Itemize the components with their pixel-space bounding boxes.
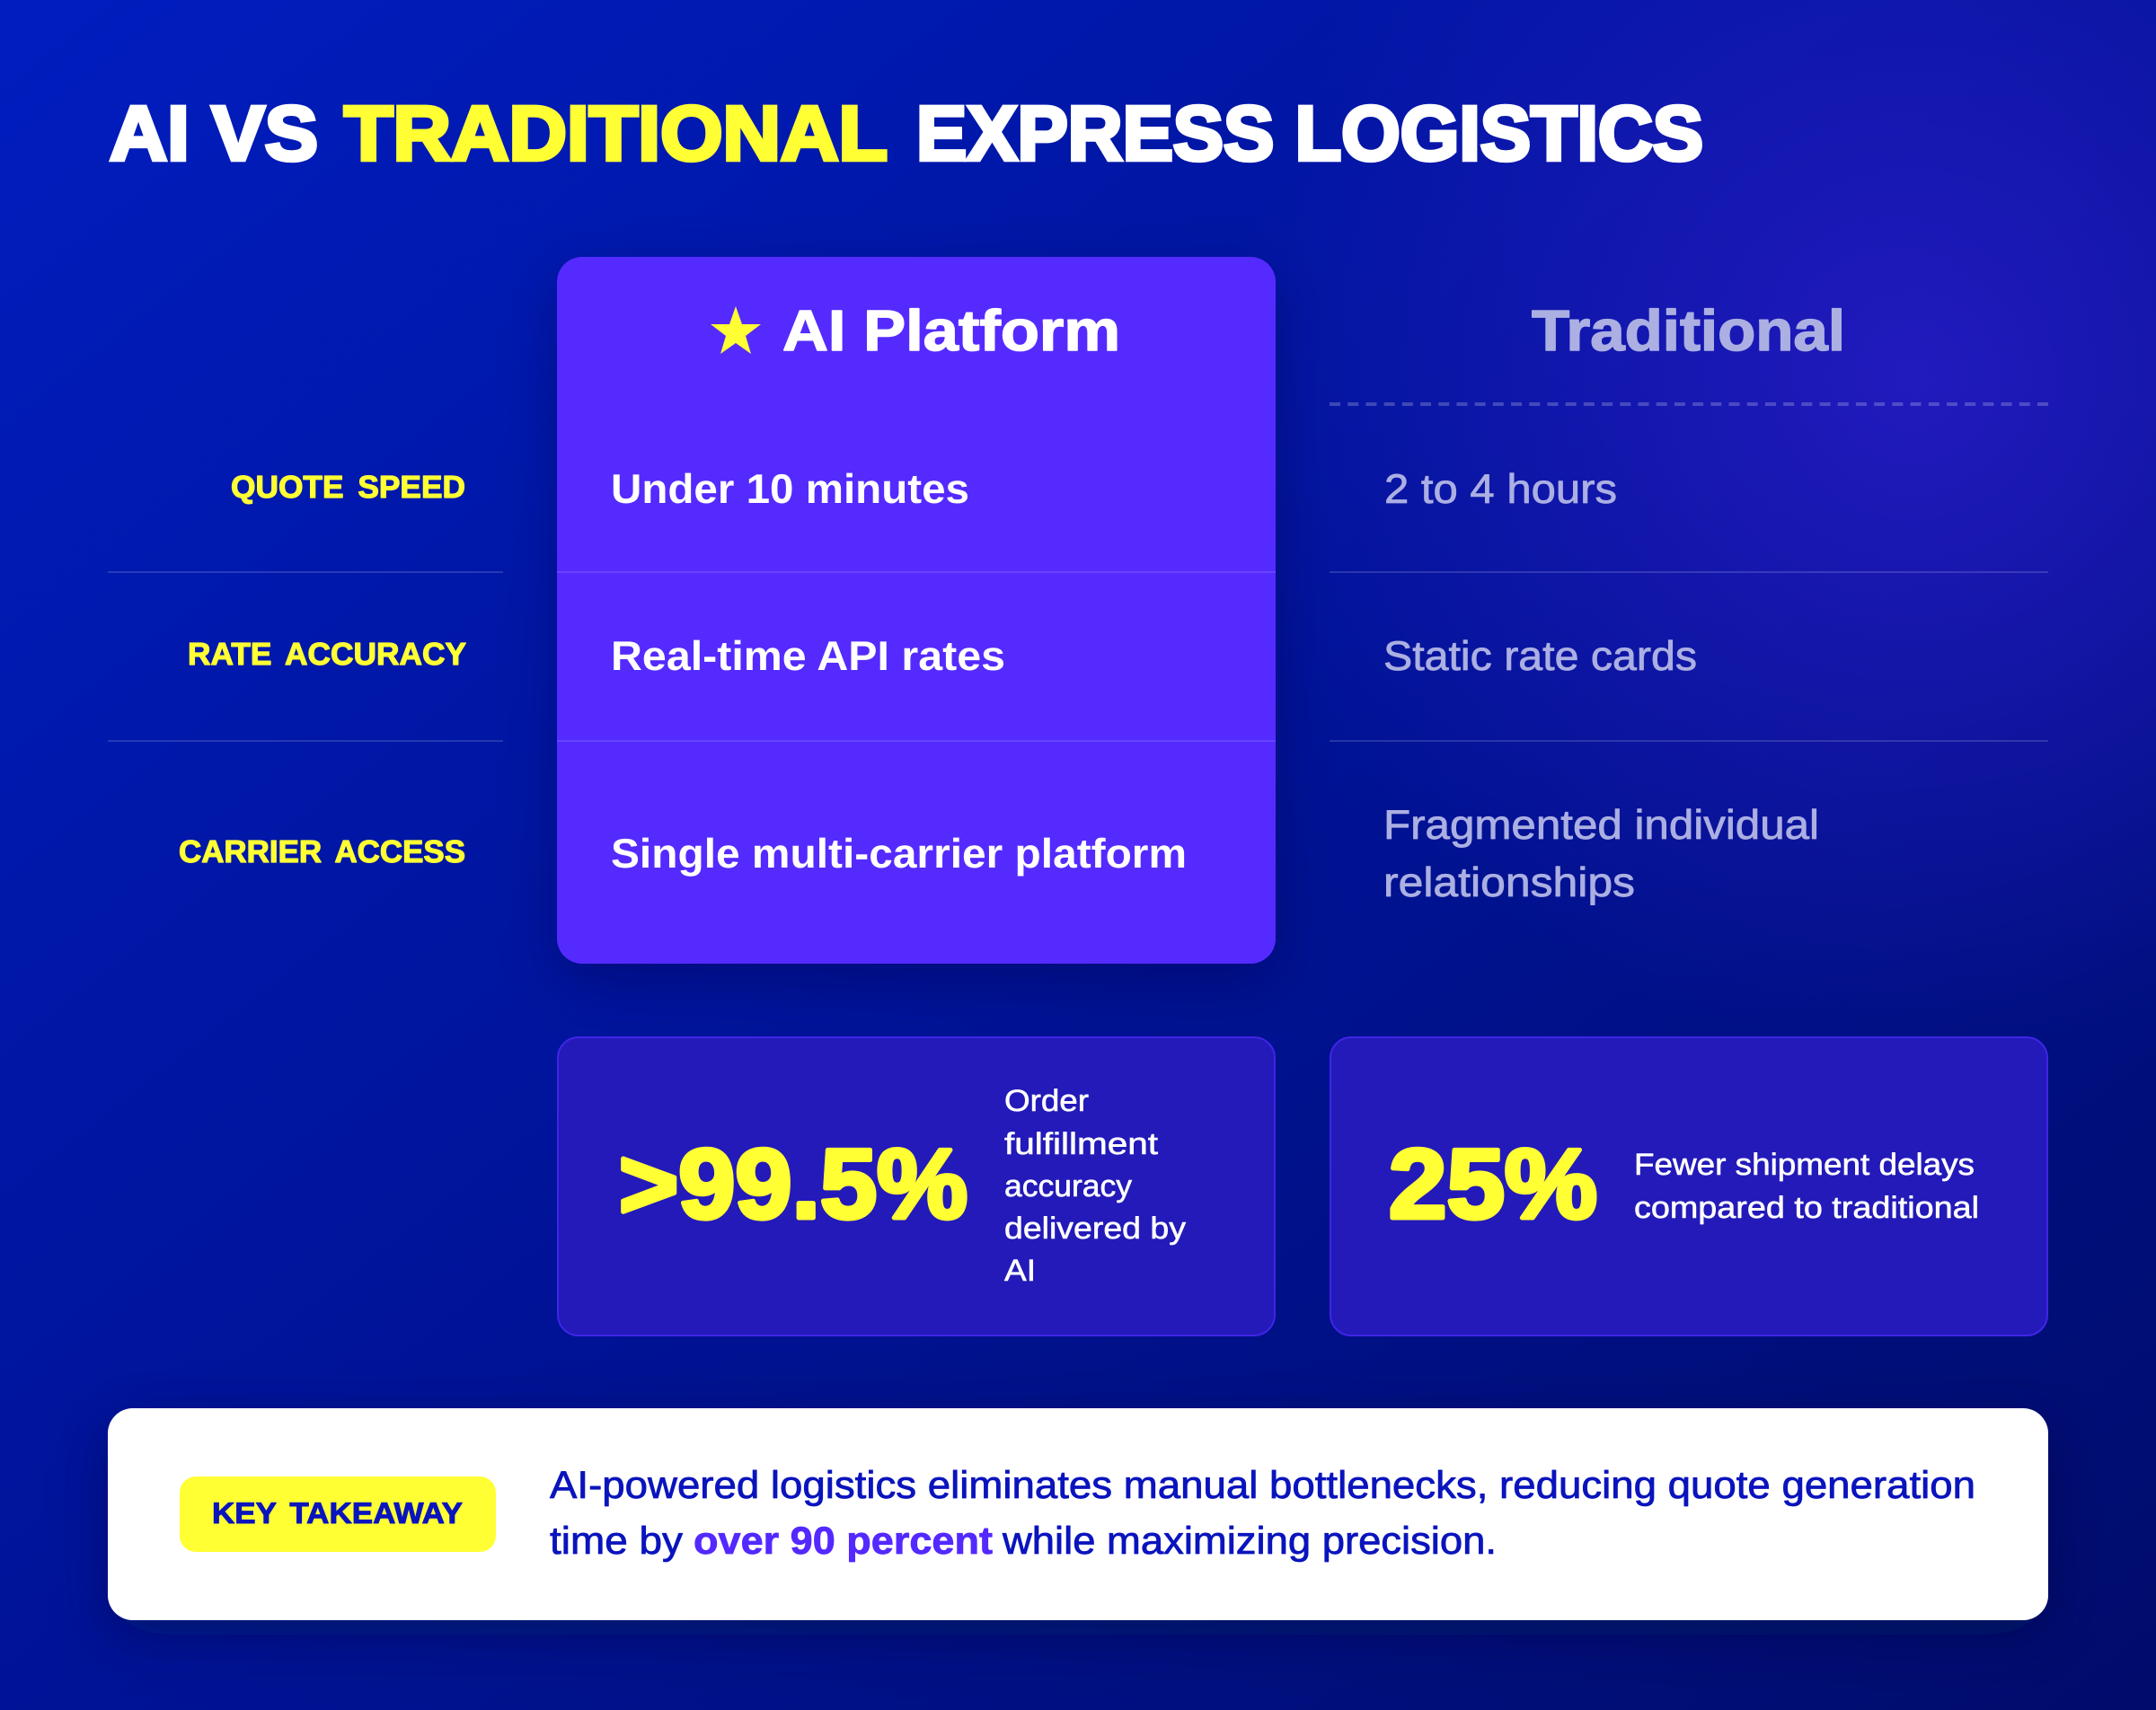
panel: traditional column bbox=[1330, 298, 2048, 905]
stat: 99.5 percent: >99.5% bbox=[619, 1129, 968, 1239]
panel: AI stat card bbox=[558, 1037, 1275, 1335]
title: TRADITIONAL bbox=[344, 91, 888, 177]
takeaway text: AI-powered logistics eliminates manual bottlenecks, reducing quote generation bbox=[550, 1464, 1975, 1507]
label: carrier access: CARRIER ACCESS bbox=[179, 834, 465, 869]
value: carrier access traditional bbox=[1383, 801, 1819, 905]
stat caption: accuracy bbox=[1004, 1169, 1132, 1203]
title: EXPRESS LOGISTICS bbox=[916, 91, 1703, 177]
value: carrier access traditional: relationships bbox=[1383, 859, 1635, 905]
stat caption: Order bbox=[1004, 1084, 1089, 1118]
takeaway text: while maximizing precision. bbox=[1002, 1520, 1497, 1563]
takeaway text: over 90 percent bbox=[694, 1520, 993, 1563]
takeaway text bbox=[550, 1464, 1975, 1563]
value: carrier access AI: Single multi-carrier platform bbox=[611, 830, 1187, 877]
row labels bbox=[179, 470, 466, 869]
heading: Traditional: Traditional bbox=[1532, 298, 1845, 363]
panel: AI platform column bbox=[557, 257, 1276, 964]
label: rate accuracy: RATE ACCURACY bbox=[188, 637, 466, 672]
heading: AI Platform: AI Platform bbox=[782, 298, 1120, 363]
value: carrier access traditional: Fragmented individual bbox=[1383, 801, 1819, 848]
stat caption bbox=[1634, 1148, 1979, 1225]
stat: 25 percent: 25% bbox=[1389, 1129, 1597, 1239]
takeaway text: time by bbox=[550, 1520, 684, 1563]
stat caption: Fewer shipment delays bbox=[1634, 1148, 1975, 1182]
value: quote speed traditional: 2 to 4 hours bbox=[1384, 465, 1617, 512]
stat caption: fulfillment bbox=[1004, 1127, 1159, 1161]
value: rate accuracy traditional: Static rate cards bbox=[1383, 632, 1697, 679]
stat caption: delivered by bbox=[1004, 1212, 1186, 1246]
title: AI VS bbox=[110, 91, 318, 177]
stat caption: compared to traditional bbox=[1634, 1191, 1979, 1225]
stat caption bbox=[1004, 1084, 1186, 1288]
value: rate accuracy AI: Real-time API rates bbox=[611, 632, 1005, 679]
icon: star bbox=[711, 306, 761, 354]
panel: key takeaway bbox=[108, 1408, 2048, 1620]
value: quote speed AI: Under 10 minutes bbox=[611, 465, 969, 512]
title bbox=[110, 91, 1703, 177]
stat caption: AI bbox=[1004, 1254, 1036, 1288]
panel: traditional stat card bbox=[1330, 1037, 2047, 1335]
badge: key takeaway bbox=[180, 1476, 496, 1552]
badge: key takeaway: KEY TAKEAWAY bbox=[212, 1496, 463, 1529]
label: quote speed: QUOTE SPEED bbox=[231, 470, 465, 505]
